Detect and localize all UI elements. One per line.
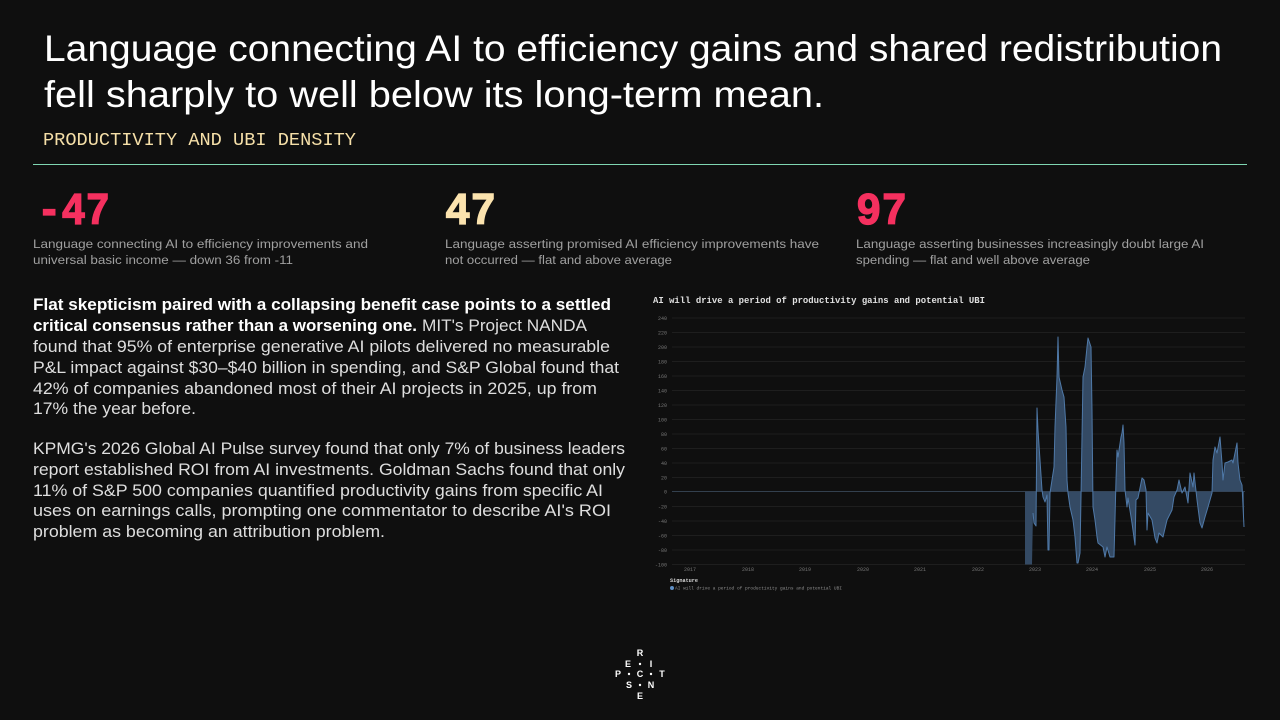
x axis labels: 2023: [1029, 567, 1041, 573]
stat: productivity and UBI: [33, 187, 368, 267]
body paragraph 1: found that 95% of enterprise generative AI pilots delivered no measurable: [33, 338, 610, 356]
x axis labels: 2017: [684, 567, 696, 573]
y axis labels: 200: [658, 345, 667, 351]
y axis labels: -100: [655, 562, 667, 568]
x axis labels: 2024: [1086, 567, 1098, 573]
y axis labels: 20: [661, 476, 667, 482]
x axis labels: 2026: [1201, 567, 1213, 573]
logo: letter diamond: R: [637, 648, 644, 658]
chart: AI will drive productivity gains and UBI: [653, 295, 1245, 592]
x axis labels: 2025: [1144, 567, 1156, 573]
y axis labels: [655, 316, 667, 568]
stat: promised efficiency: Language asserting promised AI efficiency improvements have: [445, 237, 819, 251]
y axis labels: -80: [658, 548, 667, 554]
body paragraph 2: KPMG's 2026 Global AI Pulse survey found that only 7% of business leaders: [33, 440, 625, 458]
stat: productivity and UBI: universal basic income — down 36 from -11: [33, 253, 293, 267]
logo: letter diamond: E: [625, 659, 631, 669]
x axis labels: 2020: [857, 567, 869, 573]
legend: [670, 578, 842, 592]
stat: businesses doubt spending: spending — flat and well above average: [856, 253, 1090, 267]
y axis labels: 80: [661, 432, 667, 438]
y axis labels: 220: [658, 330, 667, 336]
y axis labels: 40: [661, 461, 667, 467]
y axis labels: 100: [658, 418, 667, 424]
y axis labels: -20: [658, 504, 667, 510]
body paragraph 1: P&L impact against $30–$40 billion in spending, and S&P Global found that: [33, 359, 620, 377]
y axis labels: 240: [658, 316, 667, 322]
logo: letter diamond: T: [659, 669, 665, 679]
y axis labels: 120: [658, 403, 667, 409]
subtitle: PRODUCTIVITY AND UBI DENSITY: [43, 130, 356, 151]
stat: productivity and UBI: Language connecting AI to efficiency improvements and: [33, 237, 368, 251]
area series: [1025, 337, 1244, 564]
x axis labels: [684, 567, 1213, 573]
stat: productivity and UBI: -47: [37, 187, 110, 238]
x axis labels: 2022: [972, 567, 984, 573]
logo: letter diamond: I: [650, 659, 652, 669]
title: [44, 28, 1222, 115]
title: fell sharply to well below its long-term mean.: [44, 74, 824, 115]
line series: [1033, 337, 1244, 563]
body paragraph 2: 11% of S&P 500 companies quantified productivity gains from specific AI: [33, 482, 603, 500]
body paragraph 1: Flat skepticism paired with a collapsing benefit case points to a settled: [33, 296, 611, 314]
body paragraph 1: [33, 296, 620, 418]
stat: promised efficiency: 47: [445, 187, 496, 238]
logo: letter diamond: [615, 648, 665, 701]
y axis labels: 160: [658, 374, 667, 380]
y axis labels: 140: [658, 388, 667, 394]
x axis labels: 2018: [742, 567, 754, 573]
stat: businesses doubt spending: 97: [856, 187, 907, 238]
body paragraph 1: critical consensus rather than a worsening one.: [33, 317, 417, 335]
zero baseline: [672, 490, 1245, 492]
y axis labels: 180: [658, 360, 667, 366]
logo: letter diamond: C: [637, 669, 644, 679]
body paragraph 1: 17% the year before.: [33, 400, 196, 418]
stat: promised efficiency: not occurred — flat and above average: [445, 253, 672, 267]
body paragraph 1: MIT's Project NANDA: [422, 317, 587, 335]
stat: promised efficiency: [445, 187, 819, 267]
legend: Signature: [670, 578, 698, 584]
y axis labels: -60: [658, 534, 667, 540]
chart title: AI will drive a period of productivity gains and potential UBI: [653, 295, 985, 306]
stat: businesses doubt spending: [856, 187, 1204, 267]
logo: letter diamond: P: [615, 669, 621, 679]
x axis labels: 2019: [799, 567, 811, 573]
legend: AI will drive a period of productivity gains and potential UBI: [675, 586, 842, 592]
logo: letter diamond: N: [648, 680, 654, 690]
y axis labels: 60: [661, 446, 667, 452]
logo: letter diamond: E: [637, 691, 643, 701]
body paragraph 2: uses on earnings calls, prompting one commentator to describe AI's ROI: [33, 502, 611, 520]
y axis labels: 0: [664, 490, 667, 496]
body paragraph 1: 42% of companies abandoned most of their AI projects in 2025, up from: [33, 380, 597, 398]
stat: businesses doubt spending: Language asserting businesses increasingly doubt large AI: [856, 237, 1204, 251]
logo: letter diamond: S: [626, 680, 632, 690]
y axis labels: -40: [658, 519, 667, 525]
x axis labels: 2021: [914, 567, 926, 573]
body paragraph 2: report established ROI from AI investments. Goldman Sachs found that only: [33, 461, 626, 479]
body paragraph 2: problem as becoming an attribution problem.: [33, 523, 385, 541]
body paragraph 2: [33, 440, 626, 541]
title: Language connecting AI to efficiency gains and shared redistribution: [44, 28, 1222, 69]
